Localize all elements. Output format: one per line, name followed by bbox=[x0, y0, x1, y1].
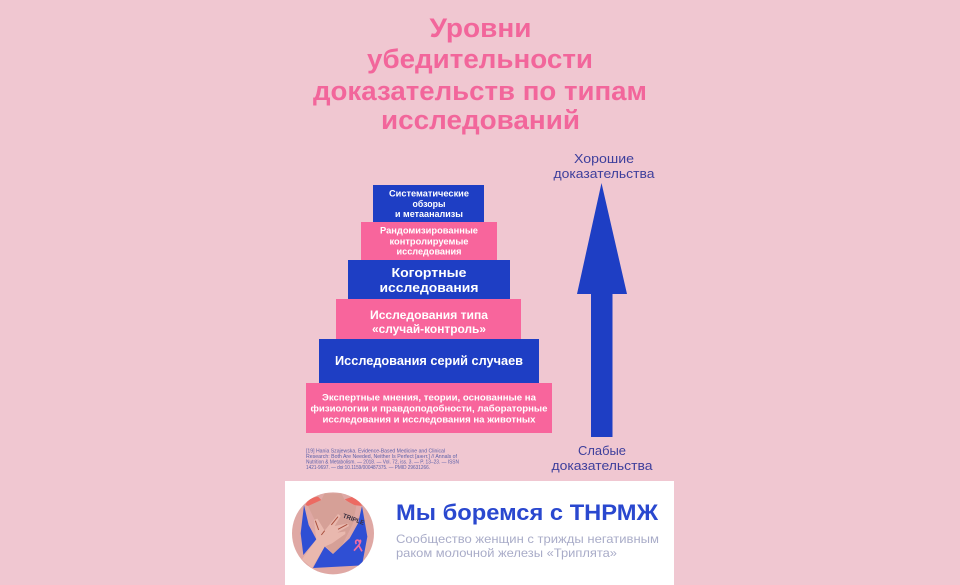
pyramid chart bbox=[306, 185, 552, 433]
level 6: expert opinions: Экспертные мнения, теории, основанные на bbox=[322, 392, 537, 404]
label: good evidence: доказательства bbox=[554, 167, 655, 181]
level 1: systematic reviews: Систематические bbox=[389, 188, 469, 200]
blue top bbox=[301, 505, 316, 555]
icon: community logo with hand and ribbon: TRIPLE bbox=[342, 513, 365, 527]
level 6: expert opinions bbox=[306, 383, 552, 433]
label: good evidence: Хорошие bbox=[574, 152, 634, 166]
shoulder straps bbox=[305, 497, 321, 506]
title: доказательств по типам bbox=[313, 76, 647, 106]
level 2: randomized controlled trials bbox=[361, 222, 497, 260]
level 2: randomized controlled trials: Рандомизированные bbox=[380, 226, 478, 236]
banner description: раком молочной железы «Триплята» bbox=[396, 546, 617, 560]
level 1: systematic reviews: обзоры bbox=[412, 199, 446, 210]
level 1: systematic reviews: и метаанализы bbox=[395, 209, 463, 220]
level 6: expert opinions: физиологии и правдоподобности, лабораторные bbox=[310, 404, 548, 414]
level 4: case-control studies: Исследования типа bbox=[370, 310, 489, 322]
level 3: cohort studies: исследования bbox=[380, 280, 478, 295]
ribbon bbox=[354, 540, 362, 551]
title bbox=[313, 13, 647, 135]
neck and chest bbox=[308, 493, 356, 553]
footnote reference: Nutrition & Metabolism. — 2018. — Vol. 72, iss. 3. — P. 13–23. — ISSN bbox=[306, 460, 459, 466]
label: weak evidence: доказательства bbox=[552, 459, 653, 473]
level 6: expert opinions: исследования и исследования на животных bbox=[322, 414, 536, 426]
level 4: case-control studies: «случай-контроль» bbox=[372, 324, 486, 336]
level 5: case series: Исследования серий случаев bbox=[335, 353, 523, 368]
label: weak evidence: Слабые bbox=[578, 444, 626, 458]
banner heading: Мы боремся с ТНРМЖ bbox=[396, 500, 658, 525]
banner description bbox=[396, 532, 659, 560]
level 3: cohort studies bbox=[348, 260, 510, 299]
arrow: weak to good evidence bbox=[577, 183, 627, 437]
label: weak evidence bbox=[552, 444, 653, 473]
footnote reference: Research: Both Are Needed, Neither Is Perfect [аннт.] // Annals of bbox=[306, 454, 458, 460]
label: good evidence bbox=[554, 152, 655, 181]
footnote reference: 1421-9697. — doi:10.1159/000487375. — PMID 29631266. bbox=[306, 465, 430, 471]
panel: community banner bbox=[285, 481, 674, 585]
hand bbox=[302, 514, 349, 568]
icon: community logo with hand and ribbon bbox=[292, 492, 374, 574]
banner description: Сообщество женщин с трижды негативным bbox=[396, 532, 659, 546]
title: убедительности bbox=[367, 44, 593, 74]
level 1: systematic reviews bbox=[373, 185, 484, 222]
level 4: case-control studies bbox=[336, 299, 521, 339]
footnote reference bbox=[306, 448, 459, 471]
title: исследований bbox=[381, 105, 580, 135]
title: Уровни bbox=[430, 13, 532, 43]
level 2: randomized controlled trials: контролируемые bbox=[390, 236, 468, 248]
level 5: case series bbox=[319, 339, 539, 383]
level 3: cohort studies: Когортные bbox=[392, 265, 466, 280]
footnote reference: [19] Hania Szajewska. Evidence-Based Medicine and Clinical bbox=[306, 448, 445, 454]
level 2: randomized controlled trials: исследования bbox=[396, 246, 462, 258]
